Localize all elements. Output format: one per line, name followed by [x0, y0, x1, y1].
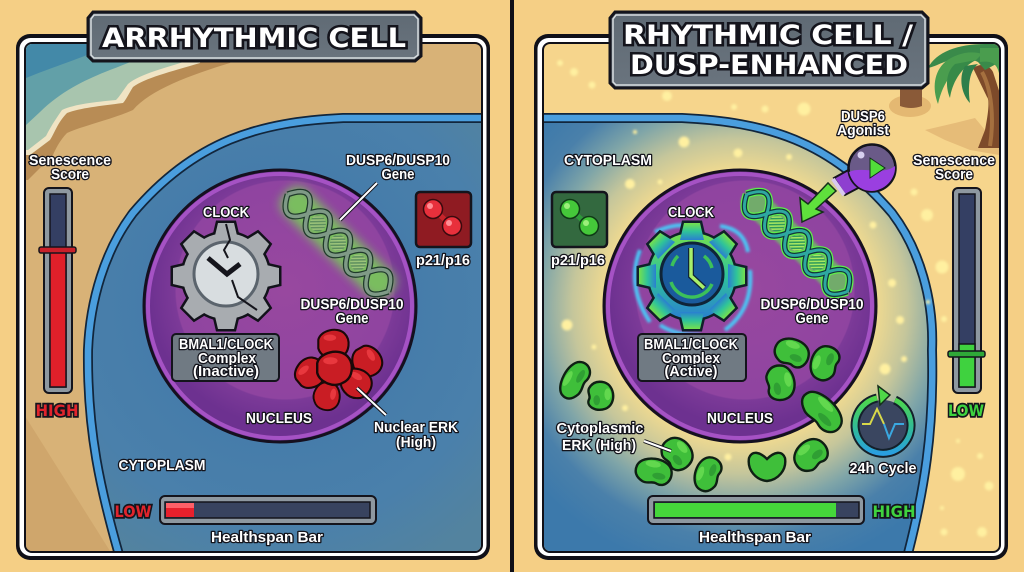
label box: BMAL1/CLOCK inactive [172, 334, 279, 381]
text labels: right panel: Agonist [837, 123, 889, 139]
DNA gene: right [735, 183, 859, 303]
palm tree [928, 44, 1002, 148]
title: arrhythmic cell [88, 12, 421, 61]
panel: rhythmic cell [525, 34, 1008, 565]
label box: BMAL1/CLOCK active: Complex [662, 351, 720, 367]
label box: BMAL1/CLOCK active [638, 334, 746, 381]
text labels: right panel: Senescence [913, 153, 995, 169]
text labels: right panel: Cytoplasmic [556, 421, 644, 437]
healthspan bar: right [648, 496, 916, 524]
senescence gauge: right [948, 188, 985, 420]
label box: BMAL1/CLOCK active: BMAL1/CLOCK [644, 337, 738, 353]
label box: BMAL1/CLOCK inactive: BMAL1/CLOCK [179, 337, 273, 353]
icon: active clock gear [635, 223, 750, 335]
text labels: left panel: Nuclear ERK [374, 420, 458, 436]
text labels: right panel: DUSP6/DUSP10 [760, 297, 864, 313]
nucleus: left [144, 170, 416, 442]
text labels: right panel: NUCLEUS [707, 411, 773, 427]
text labels: right panel: Healthspan Bar [699, 530, 811, 546]
icon: p21/p16 red box [416, 192, 471, 247]
text labels: left panel: Gene [336, 311, 368, 327]
text labels: right panel: CLOCK [668, 205, 714, 221]
senescence gauge: left: HIGH [36, 401, 78, 420]
text labels: right panel: 24h Cycle [850, 461, 916, 477]
text labels: right panel: Gene [796, 311, 828, 327]
text labels: left panel: NUCLEUS [246, 411, 312, 427]
text labels: right panel: p21/p16 [551, 253, 605, 269]
panel: arrhythmic cell [16, 34, 500, 565]
text labels: left panel: (High) [396, 435, 436, 451]
text labels: right panel: Score [935, 167, 973, 183]
icon: 24h cycle [855, 386, 911, 453]
text labels: left panel: CYTOPLASM [118, 458, 206, 474]
left leader lines [340, 183, 386, 415]
icon: DUSP6 agonist flask and arrow [800, 144, 896, 222]
text labels: left panel: Gene [382, 167, 414, 183]
text labels: left panel: Senescence [29, 153, 111, 169]
icon: nuclear ERK red cluster [290, 330, 387, 412]
senescence gauge: left [36, 188, 78, 420]
text labels: left panel [29, 153, 470, 546]
label box: BMAL1/CLOCK inactive: (Inactive) [193, 364, 259, 380]
label box: BMAL1/CLOCK inactive: Complex [198, 351, 256, 367]
text labels: left panel: CLOCK [203, 205, 249, 221]
healthspan bar: left: LOW [114, 502, 152, 521]
text labels: right panel: CYTOPLASM [564, 153, 652, 169]
divider [510, 0, 514, 572]
text labels: left panel: Score [51, 167, 89, 183]
title: rhythmic cell / DUSP-enhanced: RHYTHMIC CELL / [623, 20, 913, 51]
text labels: left panel: DUSP6/DUSP10 [300, 297, 404, 313]
text labels: left panel: Healthspan Bar [211, 530, 323, 546]
title: rhythmic cell / DUSP-enhanced: DUSP-ENHANCED [630, 50, 908, 81]
healthspan bar: left [114, 496, 376, 524]
label box: BMAL1/CLOCK active: (Active) [664, 364, 718, 380]
DNA gene: left [275, 181, 401, 305]
text labels: right panel: ERK (High) [562, 438, 636, 454]
text labels: right panel: DUSP6 [841, 109, 885, 125]
right leader line [644, 441, 671, 451]
healthspan bar: right: HIGH [872, 502, 916, 521]
icon: p21/p16 green box [552, 192, 607, 247]
text labels: left panel: p21/p16 [416, 253, 470, 269]
nucleus: right [604, 170, 876, 442]
title: rhythmic cell / DUSP-enhanced [610, 12, 928, 88]
icons: green ERK beans [555, 334, 848, 494]
sparkles [557, 60, 994, 537]
senescence gauge: right: LOW [948, 401, 984, 420]
icon: broken clock gear [173, 223, 279, 329]
text labels: left panel: DUSP6/DUSP10 [346, 153, 450, 169]
text labels: right panel [551, 109, 995, 546]
title: arrhythmic cell: ARRHYTHMIC CELL [102, 23, 406, 54]
